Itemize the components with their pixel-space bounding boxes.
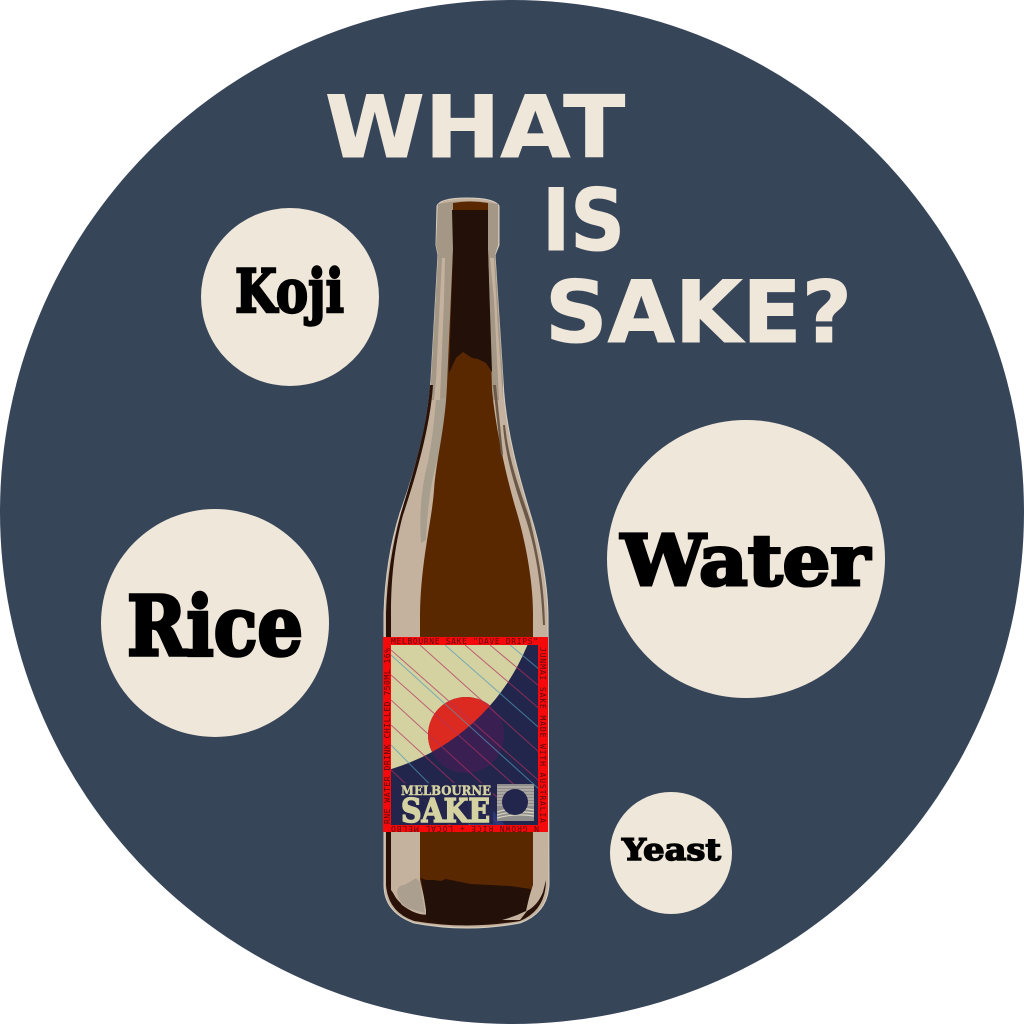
bottle glass (384, 198, 549, 928)
left lower highlight (391, 832, 425, 913)
label border text: JUNMAI SAKE MADE WITH AUSTRALIA (538, 647, 547, 823)
label border text: N GROWN RICE + LOCAL MELBO (391, 824, 539, 833)
sake bottle (383, 198, 550, 928)
moon icon (497, 784, 534, 821)
label artwork (391, 645, 538, 825)
title (325, 78, 852, 363)
sake label (383, 637, 548, 832)
ingredient: koji (201, 208, 379, 386)
right lower highlight (525, 832, 543, 911)
right dark line (493, 385, 545, 625)
title: IS (542, 171, 625, 271)
title: SAKE? (545, 263, 852, 363)
upper shoulder shading (420, 398, 449, 543)
ingredient: yeast (610, 792, 732, 914)
lower glass shadow (397, 878, 425, 913)
ingredient: rice (101, 509, 329, 737)
red sun (428, 697, 504, 773)
ingredient: water: Water (620, 519, 871, 602)
title: WHAT (325, 78, 625, 178)
sake text: SAKE (401, 791, 490, 830)
label border text: MELBOURNE SAKE "DAVE DRIPS" (391, 637, 538, 646)
ingredient: rice: Rice (127, 579, 303, 675)
label red border (383, 637, 548, 832)
ingredient: koji: Koji (235, 257, 344, 327)
neck glass shading (431, 201, 503, 400)
ingredient: water (607, 420, 885, 698)
label border text (383, 637, 547, 833)
brand text: MELBOURNE (401, 784, 491, 799)
ingredient: yeast: Yeast (621, 833, 721, 868)
dark base (421, 878, 531, 925)
label border text: RNE WATER DRINK CHILLED 750ML 16% (383, 648, 392, 824)
diagonal lines (391, 645, 538, 825)
dark neck (449, 210, 492, 373)
brown liquid (420, 202, 533, 914)
dark left edge (386, 385, 546, 926)
neck highlights (434, 258, 503, 400)
